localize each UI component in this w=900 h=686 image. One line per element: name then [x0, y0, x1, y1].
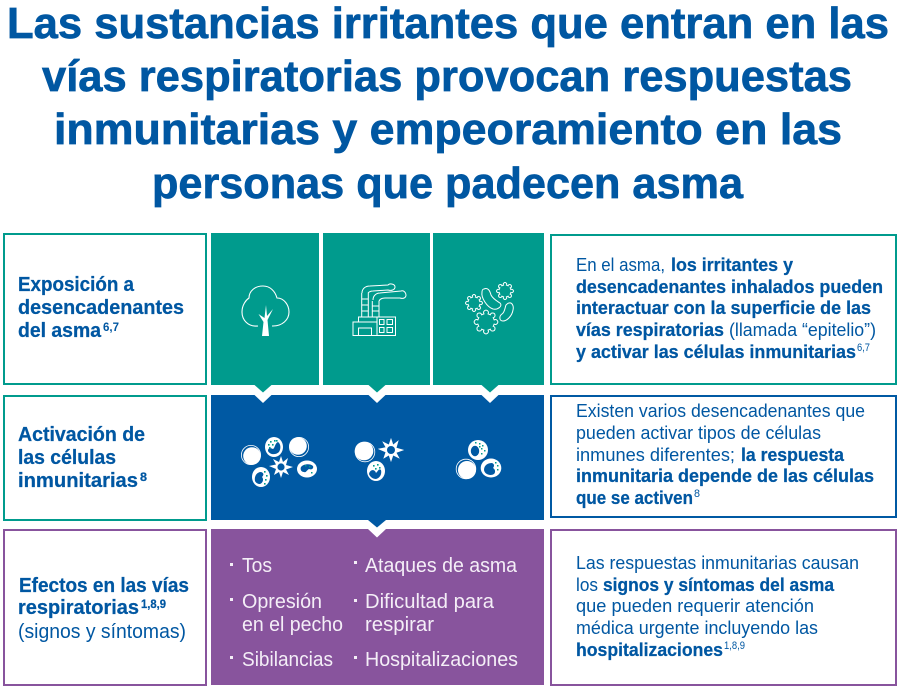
panel: exposure label: Exposición a [18, 274, 135, 296]
panel: exposure label: desencadenantes [18, 297, 184, 319]
text block: effects explanation: que pueden requerir atención [576, 595, 814, 616]
text block: effects explanation: Las respuestas inmunitarias causan [576, 552, 859, 573]
arrow: factory to cells [368, 385, 386, 403]
title: inmunitarias y empeoramiento en las [54, 105, 842, 154]
text block: exposure explanation: vías respiratorias [576, 319, 724, 340]
panel: exposure label [4, 234, 206, 384]
arrow: cells to effects [368, 520, 386, 538]
arrow: germs to cells [482, 385, 498, 403]
panel: activation label: inmunitarias [18, 470, 138, 492]
panel: tree trigger [211, 233, 319, 385]
icon: immune cells group 1 [241, 437, 317, 487]
panel: effects label: 1,8,9 [141, 597, 166, 611]
panel: activation label: las células [18, 447, 116, 469]
bullet list: symptoms: Hospitalizaciones [365, 649, 518, 671]
icon: tree [242, 286, 289, 336]
bullet list: symptoms: Tos [242, 555, 272, 577]
panel: effects label: (signos y síntomas) [18, 621, 186, 643]
text block: effects explanation [551, 530, 896, 685]
bullet list: symptoms: Dificultad para [365, 591, 495, 613]
text block: effects explanation: los [576, 574, 598, 595]
panel: factory trigger [323, 233, 430, 385]
icon: immune cells group 2 [355, 438, 404, 481]
text block: effects explanation: signos y síntomas del asma [603, 574, 835, 595]
text block: effects explanation: médica urgente incluyendo las [576, 617, 818, 638]
panel: activation label: 8 [140, 470, 147, 484]
panel: immune cell activation [211, 395, 544, 520]
panel: symptoms list [211, 529, 544, 685]
text block: exposure explanation: 6,7 [857, 342, 870, 354]
bullet list: symptoms: en el pecho [242, 614, 343, 636]
icon: immune cells group 3 [456, 440, 501, 479]
text block: exposure explanation: los irritantes y [671, 254, 794, 275]
panel: germs trigger [433, 233, 544, 385]
text block: exposure explanation [551, 235, 896, 384]
bullet list: symptoms [230, 555, 518, 671]
text block: activation explanation: inmunes diferentes; [576, 444, 735, 465]
text block: activation explanation: pueden activar tipos de células [576, 422, 821, 443]
panel: effects label [4, 530, 206, 685]
panel: exposure label: 6,7 [103, 320, 119, 334]
title: vías respiratorias provocan respuestas [42, 52, 852, 101]
text block: exposure explanation: En el asma, [576, 254, 665, 275]
text block: activation explanation: inmunitaria depende de las células [576, 465, 874, 486]
panel: activation label: Activación de [18, 424, 145, 446]
icon: factory [353, 284, 406, 336]
panel: effects label: respiratorias [18, 597, 139, 619]
text block: exposure explanation: interactuar con la superficie de las [576, 297, 871, 318]
text block: exposure explanation: desencadenantes inhalados pueden [576, 276, 883, 297]
text block: activation explanation: la respuesta [741, 444, 845, 465]
text block: effects explanation: hospitalizaciones [576, 639, 723, 660]
bullet list: symptoms: Sibilancias [242, 649, 333, 671]
panel: exposure label: del asma [18, 320, 102, 342]
text block: activation explanation: Existen varios desencadenantes que [576, 400, 865, 421]
bullet list: symptoms: Ataques de asma [365, 555, 518, 577]
panel: activation label [4, 396, 206, 520]
bullet list: symptoms: Opresión [242, 591, 322, 613]
arrow: tree to cells [254, 385, 272, 403]
text block: exposure explanation: (llamada “epitelio”) [729, 319, 876, 340]
text block: activation explanation: 8 [694, 488, 700, 500]
text block: exposure explanation: y activar las células inmunitarias [576, 341, 856, 362]
icon: germs [466, 283, 513, 334]
panel: effects label: Efectos en las vías [19, 575, 189, 597]
text block: activation explanation [551, 396, 896, 517]
bullet list: symptoms: respirar [365, 614, 434, 636]
text block: effects explanation: 1,8,9 [724, 640, 745, 652]
title: personas que padecen asma [152, 159, 744, 208]
title: Las sustancias irritantes que entran en las [7, 0, 889, 48]
text block: activation explanation: que se activen [576, 487, 693, 508]
title [7, 0, 889, 208]
